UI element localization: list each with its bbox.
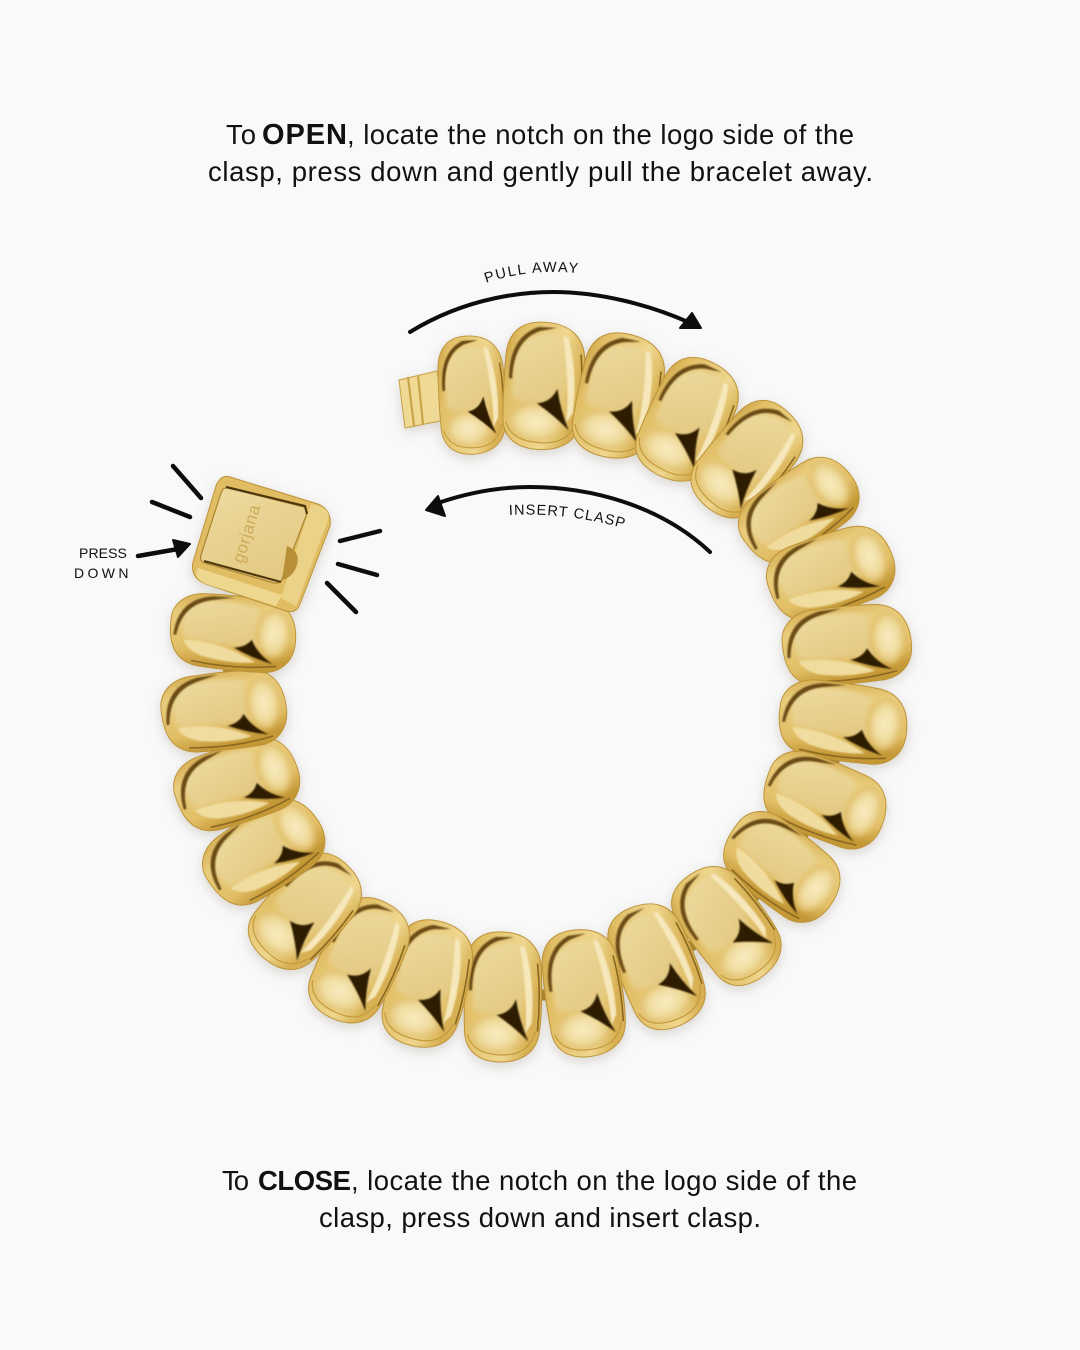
- label: press down: DOWN: [74, 565, 132, 581]
- label: press down: PRESS: [79, 545, 127, 561]
- link 14: [537, 924, 631, 1061]
- heading: how to open: , locate the notch on the logo side of the: [347, 119, 854, 150]
- link 20: [166, 728, 308, 840]
- clasp logo: gorjana: [229, 502, 264, 565]
- arrow: pull away: [410, 292, 701, 332]
- heading: how to close: To: [222, 1165, 249, 1196]
- link 22: [166, 589, 300, 677]
- link 3: [566, 326, 672, 466]
- link 6: [726, 443, 872, 577]
- press lines: left: [152, 466, 201, 517]
- link 9: [774, 675, 912, 769]
- link 7: [758, 516, 904, 630]
- heading: how to close: clasp, press down and insert clasp.: [319, 1202, 761, 1233]
- heading: how to open: [208, 119, 873, 187]
- link 5: [678, 387, 818, 533]
- label: insert clasp: INSERT CLASP: [510, 504, 625, 526]
- link 8: [779, 601, 914, 689]
- clasp: [193, 476, 330, 612]
- link 13: [597, 892, 717, 1040]
- heading: how to close: CLOSE: [258, 1165, 351, 1196]
- heading: how to open: OPEN: [262, 119, 347, 151]
- heading: how to close: , locate the notch on the logo side of the: [351, 1165, 857, 1196]
- link 15: [463, 931, 543, 1063]
- link 21: [158, 666, 290, 756]
- clasp tongue: [399, 371, 445, 428]
- link 19: [191, 786, 337, 919]
- link 16: [375, 913, 481, 1055]
- link 18: [235, 840, 377, 984]
- arrow: insert clasp: [426, 487, 710, 552]
- link 12: [658, 852, 795, 998]
- heading: how to open: To: [226, 119, 256, 150]
- label: press down: [74, 545, 132, 581]
- press lines: right: [327, 531, 380, 612]
- connecting rod: [224, 386, 847, 997]
- link 17: [298, 887, 422, 1035]
- heading: how to open: clasp, press down and gently pull the bracelet away.: [208, 156, 873, 187]
- link 1: [436, 334, 508, 456]
- link 10: [753, 741, 897, 859]
- bracelet: [158, 320, 914, 1063]
- link 11: [709, 798, 855, 936]
- link 4: [625, 346, 751, 494]
- heading: how to close: [222, 1165, 857, 1233]
- link 2: [500, 320, 587, 452]
- label: pull away: PULL AWAY: [484, 262, 578, 282]
- arrow: press down: [138, 540, 190, 557]
